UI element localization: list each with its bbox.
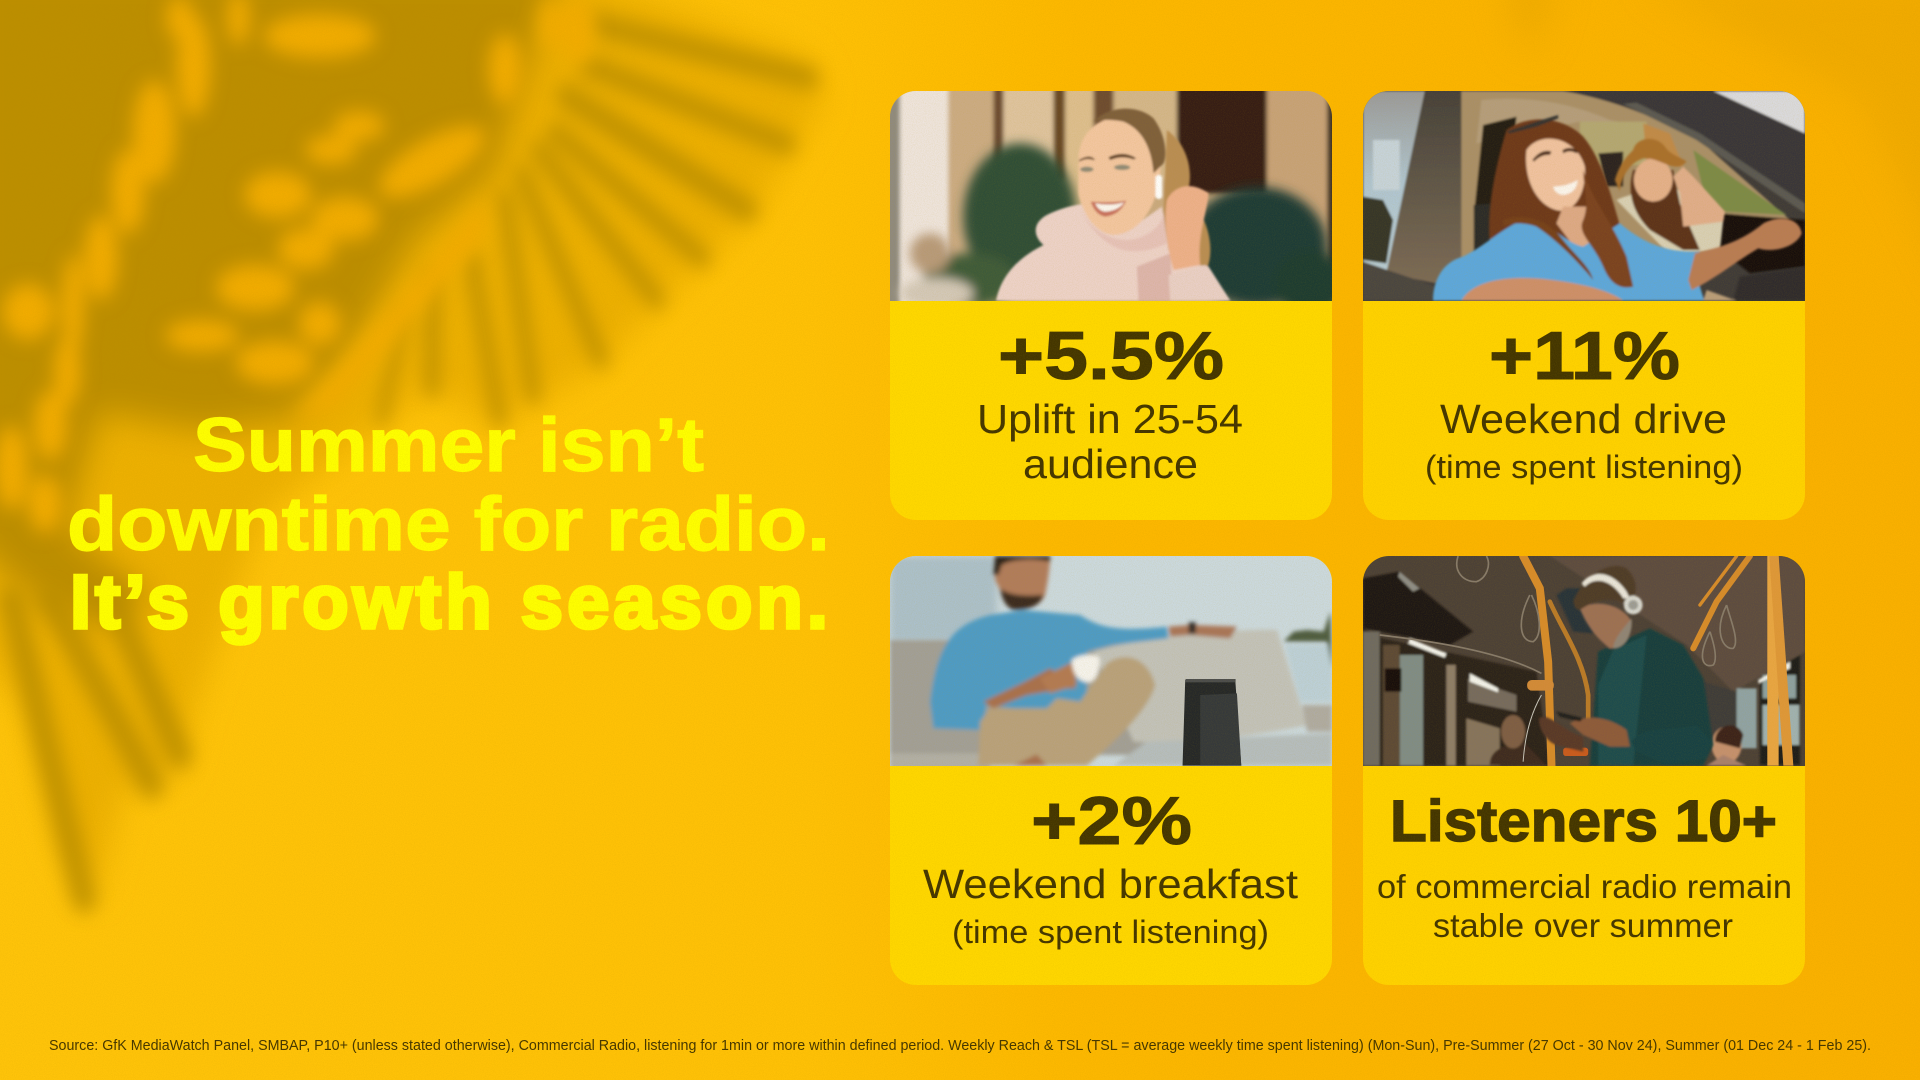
headline: downtime for radio. [67, 482, 830, 567]
card body [1363, 91, 1805, 520]
photo: women in car [1363, 91, 1805, 301]
label: uplift: Uplift in 25-54 [977, 396, 1243, 442]
grab rails [1523, 556, 1750, 766]
panel: weekend breakfast [880, 545, 1360, 985]
head [995, 556, 1050, 610]
photo: man with headphones on a bus [1363, 556, 1805, 766]
shorts [978, 657, 1155, 766]
label: weekend drive: Weekend drive [1440, 396, 1727, 442]
note: time spent listening: (time spent listening) [952, 914, 1269, 950]
man [1539, 566, 1713, 766]
headline: It’s growth season. [70, 560, 828, 645]
panel: listeners 10+ [1363, 556, 1805, 985]
note: time spent listening: (time spent listening) [1425, 449, 1743, 485]
shirt [930, 610, 1169, 730]
card body [890, 91, 1332, 520]
label: audience: audience [1023, 441, 1198, 487]
photo: woman with earbuds [890, 91, 1332, 301]
card body [1363, 556, 1805, 985]
panel: weekend drive [1363, 91, 1805, 520]
label: stable over summer: stable over summer [1433, 907, 1733, 944]
second woman [1615, 139, 1725, 253]
photo: man on sofa with smart speaker [890, 556, 1332, 766]
card body [890, 556, 1332, 985]
palm leaf shadow [0, 0, 825, 899]
headline [67, 403, 830, 645]
panel: uplift 25-54 [890, 91, 1332, 520]
label: of commercial radio remain: of commercial radio remain [1377, 868, 1792, 905]
stat: +11%: +11% [1489, 318, 1680, 394]
label: weekend breakfast: Weekend breakfast [923, 861, 1299, 907]
woman [996, 109, 1230, 301]
stat: +2%: +2% [1031, 783, 1192, 859]
driver [1433, 115, 1805, 301]
source note: Source: GfK MediaWatch Panel, SMBAP, P10+ (unless stated otherwise), Commercial Radio, listening for 1min or more within defined period. Weekly Reach & TSL (TSL = average weekly time spent listening) (Mon-Sun), Pre-Summer (27 Oct - 30 Nov 24), Summer (01 Dec 24 - 1 Feb 25). [49, 1038, 1871, 1054]
heading: listeners 10+: Listeners 10+ [1390, 789, 1777, 854]
smart speaker [1183, 679, 1241, 766]
stat: +5.5%: +5.5% [998, 318, 1224, 394]
headline: Summer isn’t [193, 403, 704, 488]
top-right faint shadow [1505, 0, 1920, 300]
